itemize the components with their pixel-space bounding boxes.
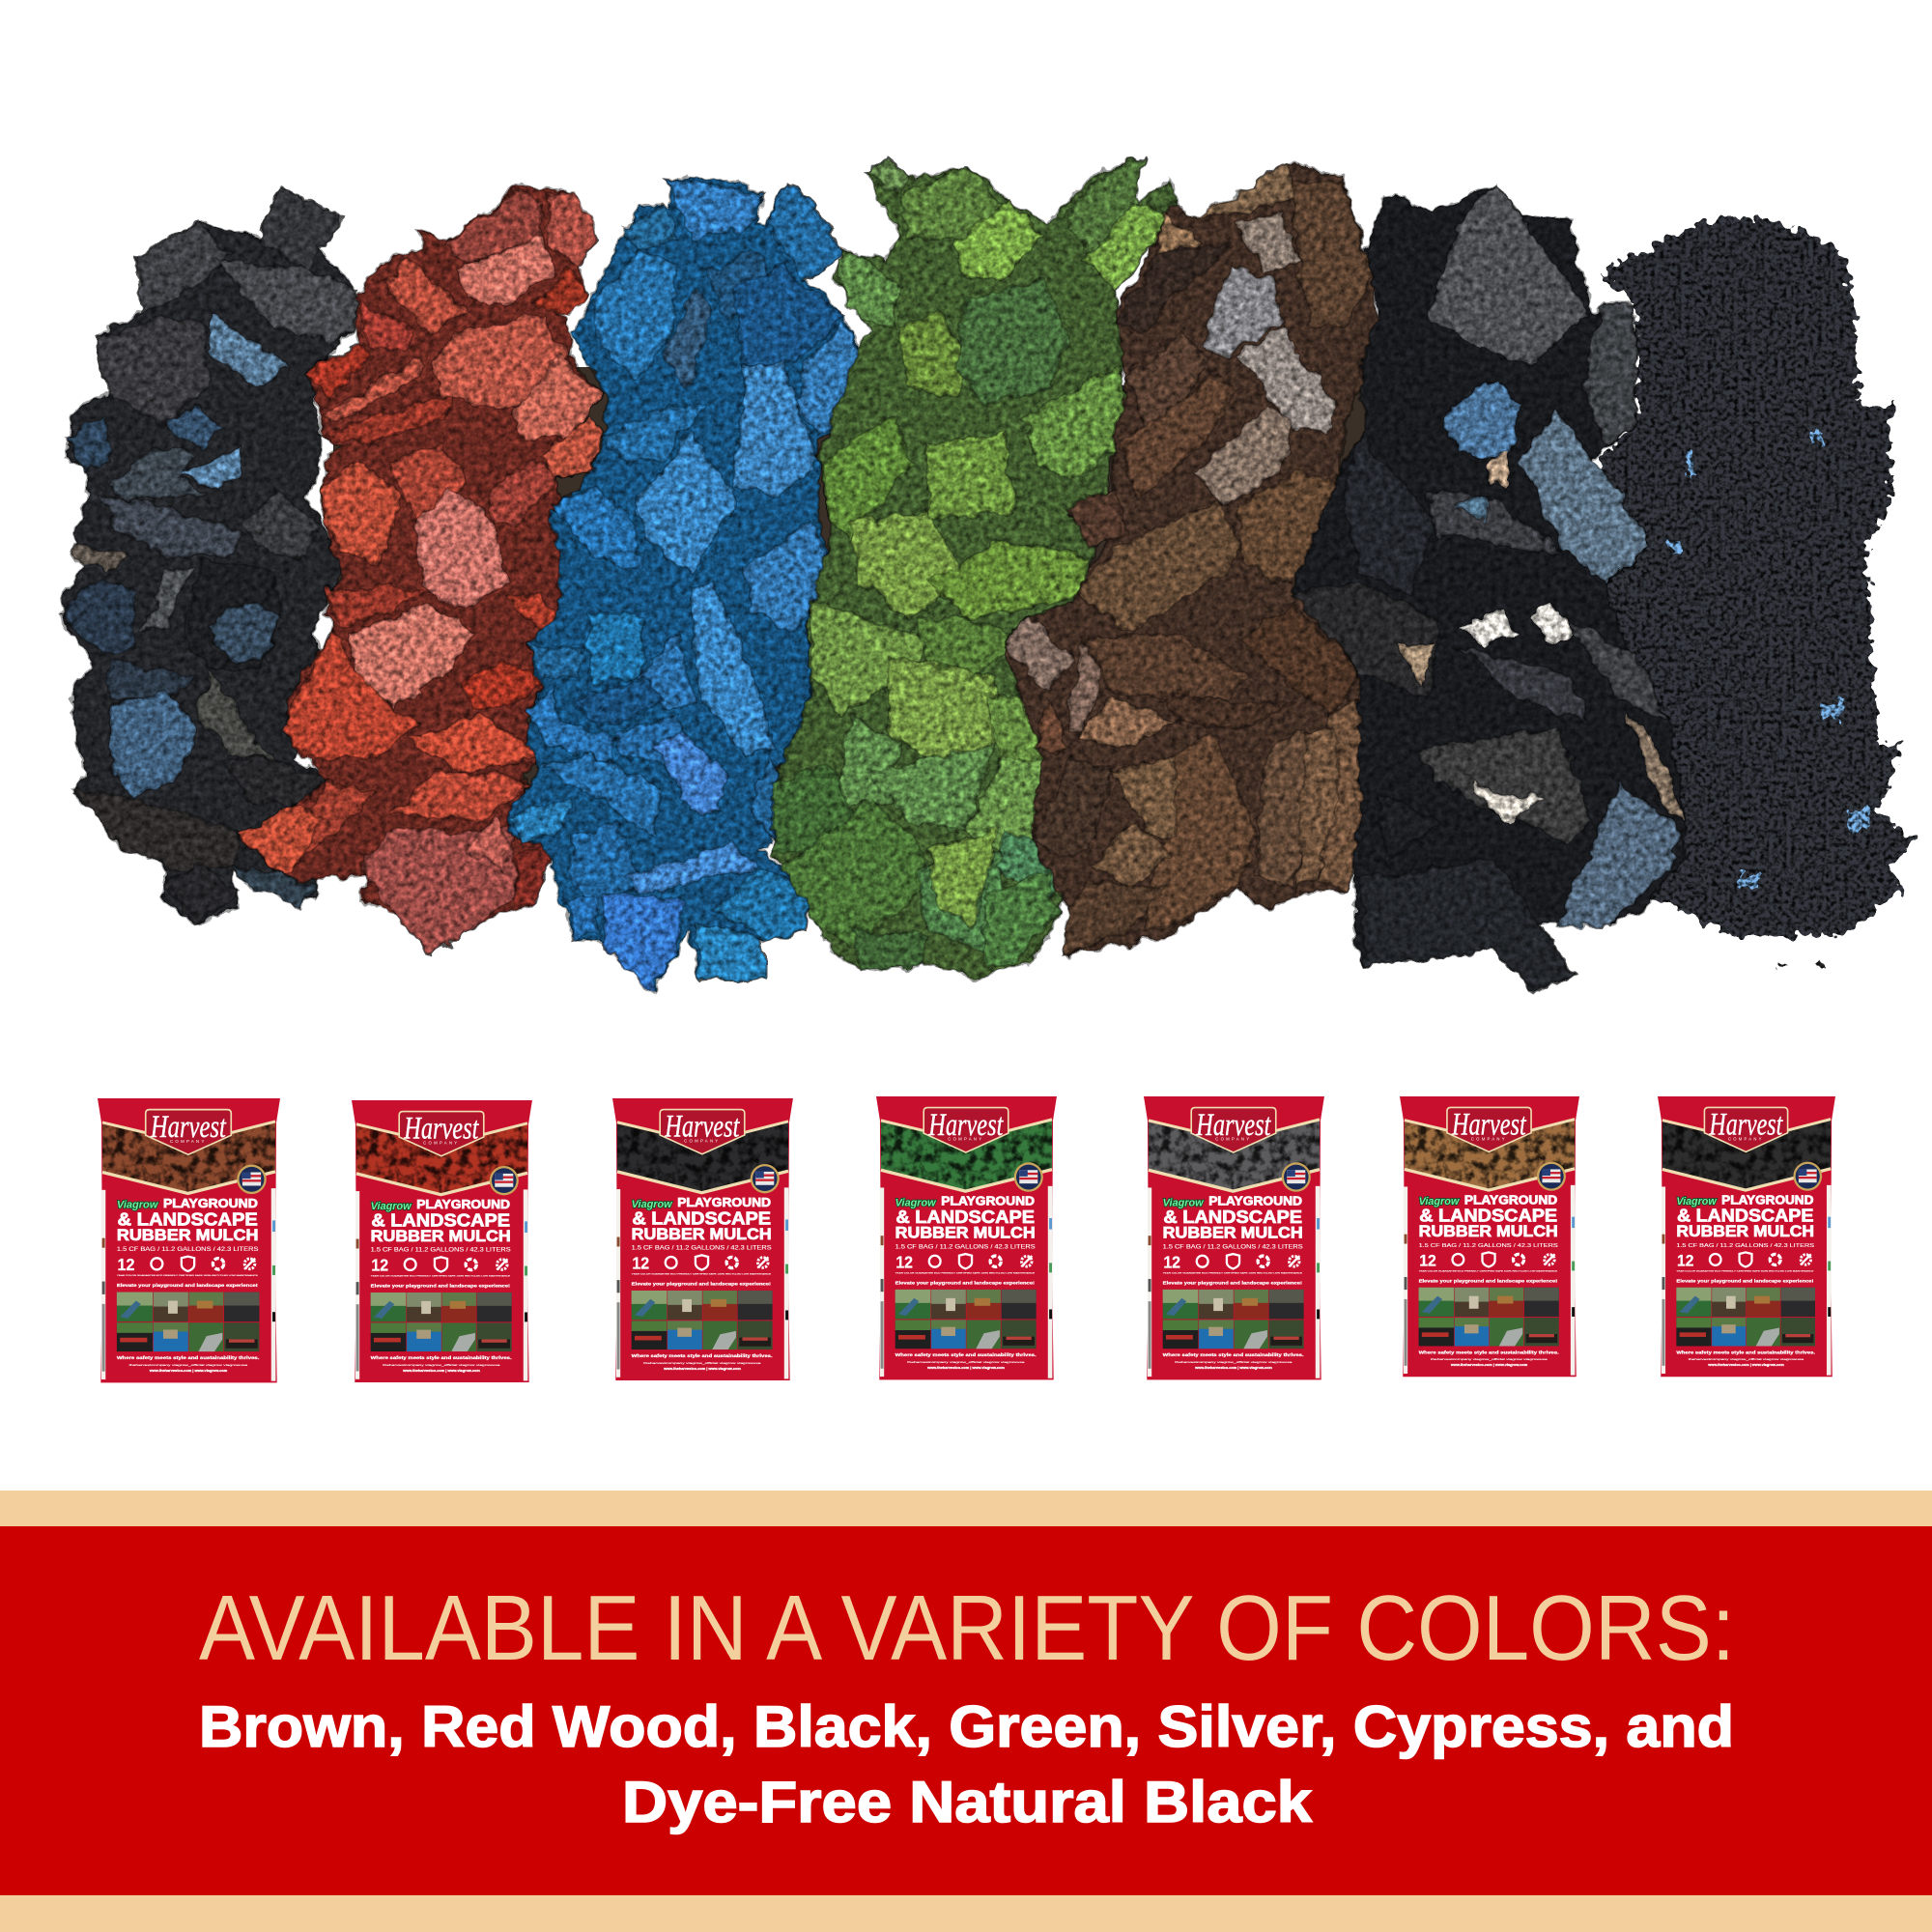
- bag: green: theharvestcompany viagrow_official viagrow viagrowusa: [907, 1360, 1025, 1364]
- product bags row: [98, 1096, 1835, 1382]
- bag: black: & LANDSCAPE: [632, 1208, 771, 1228]
- bag: brown: Harvest: [150, 1109, 226, 1145]
- bag: cypress: RUBBER MULCH: [1419, 1223, 1558, 1240]
- bag: green: Where safety meets style and sustainability thrives.: [895, 1352, 1037, 1358]
- bag: black: RUBBER MULCH: [632, 1226, 772, 1243]
- bag: black: Viagrow: [632, 1199, 673, 1210]
- bag: silver: www.theharvestco.com | www.viagrow.com: [1194, 1366, 1272, 1370]
- bag: brown: PLAYGROUND: [163, 1196, 258, 1210]
- mulch: silver: [59, 186, 356, 924]
- bag: cypress: YEAR COLOR GUARANTEE ECO FRIENDLY CERTIFIED SAFE 100% RECYCLED LOW MAINTENANCE: [1419, 1269, 1558, 1272]
- bag: red wood: theharvestcompany viagrow_official viagrow viagrowusa: [383, 1363, 500, 1367]
- bag: black: www.theharvestco.com | www.viagrow.com: [663, 1367, 741, 1371]
- bag: cypress: theharvestcompany viagrow_official viagrow viagrowusa: [1431, 1357, 1548, 1361]
- bag: black: [612, 1098, 793, 1380]
- bag: brown: theharvestcompany viagrow_official viagrow viagrowusa: [128, 1363, 248, 1367]
- bag: silver: Harvest: [1196, 1108, 1271, 1143]
- color list line 1: Brown, Red Wood, Black, Green, Silver, Cypress, and: [199, 1694, 1734, 1759]
- bag: brown: Elevate your playground and landscape experience!: [117, 1283, 258, 1289]
- bag: black: 1.5 CF BAG / 11.2 GALLONS / 42.3 LITERS: [632, 1246, 772, 1252]
- bag: brown: Where safety meets style and sustainability thrives.: [117, 1355, 260, 1361]
- bag: red wood: COMPANY: [423, 1141, 459, 1146]
- bag: silver: theharvestcompany viagrow_official viagrow viagrowusa: [1175, 1360, 1293, 1364]
- bag: cypress: Where safety meets style and sustainability thrives.: [1419, 1350, 1560, 1355]
- bag: brown: 1.5 CF BAG / 11.2 GALLONS / 42.3 LITERS: [117, 1247, 258, 1253]
- bag: cypress: Harvest: [1451, 1107, 1526, 1142]
- bag: black: Elevate your playground and landscape experience!: [632, 1282, 771, 1288]
- bag: cypress: PLAYGROUND: [1464, 1192, 1557, 1208]
- banner top stripe: [0, 1491, 1932, 1526]
- heading: AVAILABLE IN A VARIETY OF COLORS:: [199, 1577, 1735, 1680]
- banner red panel: [0, 1526, 1932, 1895]
- mulch: red wood: [240, 186, 603, 954]
- bag: red wood: & LANDSCAPE: [371, 1210, 510, 1230]
- bag: green: RUBBER MULCH: [895, 1224, 1036, 1242]
- banner bottom stripe: [0, 1895, 1932, 1932]
- bag: brown: [98, 1098, 280, 1382]
- bag: silver: 12: [1163, 1252, 1180, 1271]
- bag: cypress: www.theharvestco.com | www.viagrow.com: [1450, 1363, 1527, 1367]
- bag: brown: www.theharvestco.com | www.viagrow.com: [149, 1369, 227, 1373]
- mulch: dye-free crumb black: [1595, 217, 1915, 970]
- bag: red wood: Elevate your playground and landscape experience!: [371, 1284, 510, 1290]
- bag: black: PLAYGROUND: [677, 1195, 771, 1209]
- bag: black: Where safety meets style and sustainability thrives.: [632, 1353, 773, 1359]
- bag: silver: COMPANY: [1215, 1137, 1251, 1142]
- banner: [0, 1491, 1932, 1932]
- mulch: green: [773, 158, 1179, 977]
- bag: dye-free natural black: COMPANY: [1728, 1136, 1764, 1141]
- bag: red wood: 12: [371, 1257, 388, 1275]
- bag: cypress: COMPANY: [1471, 1136, 1507, 1141]
- bag: red wood: RUBBER MULCH: [371, 1228, 511, 1245]
- bag: green: www.theharvestco.com | www.viagrow.com: [926, 1366, 1005, 1370]
- bag: dye-free natural black: 1.5 CF BAG / 11.2 GALLONS / 42.3 LITERS: [1676, 1243, 1814, 1249]
- bag: red wood: YEAR COLOR GUARANTEE ECO FRIENDLY CERTIFIED SAFE 100% RECYCLED LOW MAINTENANCE: [371, 1274, 511, 1277]
- bag: green: 12: [895, 1252, 913, 1271]
- bag: black: YEAR COLOR GUARANTEE ECO FRIENDLY CERTIFIED SAFE 100% RECYCLED LOW MAINTENANCE: [632, 1272, 772, 1275]
- bag: cypress: Elevate your playground and landscape experience!: [1419, 1279, 1558, 1285]
- bag: cypress: Viagrow: [1419, 1196, 1460, 1208]
- bag: green: 1.5 CF BAG / 11.2 GALLONS / 42.3 LITERS: [895, 1244, 1036, 1250]
- bag: cypress: 1.5 CF BAG / 11.2 GALLONS / 42.3 LITERS: [1419, 1243, 1558, 1249]
- mulch: blue: [507, 178, 870, 990]
- bag: dye-free natural black: PLAYGROUND: [1721, 1193, 1813, 1208]
- bag: silver: Viagrow: [1163, 1197, 1205, 1208]
- mulch: black: [1293, 184, 1687, 990]
- bag: black: 12: [632, 1255, 649, 1273]
- bag: brown: Viagrow: [117, 1200, 159, 1211]
- bag: red wood: Viagrow: [371, 1201, 412, 1212]
- bag: green: PLAYGROUND: [941, 1194, 1035, 1208]
- bag: brown: RUBBER MULCH: [117, 1226, 258, 1244]
- bag: dye-free natural black: www.theharvestco.com | www.viagrow.com: [1707, 1363, 1784, 1367]
- bag: red wood: Harvest: [404, 1112, 479, 1147]
- bag: green: COMPANY: [948, 1137, 983, 1142]
- bag: brown: 12: [118, 1255, 134, 1274]
- bag: green: YEAR COLOR GUARANTEE ECO FRIENDLY CERTIFIED SAFE 100% RECYCLED LOW MAINTENANCE: [895, 1271, 1036, 1274]
- bag: black: Harvest: [665, 1110, 740, 1145]
- bag: red wood: [352, 1100, 532, 1382]
- bag: dye-free natural black: 12: [1677, 1251, 1693, 1270]
- bag: cypress: [1400, 1096, 1579, 1377]
- bag: dye-free natural black: RUBBER MULCH: [1676, 1223, 1814, 1240]
- bag: dye-free natural black: YEAR COLOR GUARANTEE ECO FRIENDLY CERTIFIED SAFE 100% RECYCLED LOW MAINTENANCE: [1676, 1269, 1814, 1272]
- bag: silver: Elevate your playground and landscape experience!: [1163, 1281, 1302, 1287]
- bag: green: Harvest: [928, 1108, 1004, 1143]
- bag: silver: YEAR COLOR GUARANTEE ECO FRIENDLY CERTIFIED SAFE 100% RECYCLED LOW MAINTENANCE: [1163, 1271, 1303, 1274]
- bag: green: Viagrow: [895, 1197, 937, 1208]
- bag: brown: COMPANY: [170, 1139, 207, 1144]
- bag: silver: & LANDSCAPE: [1163, 1208, 1302, 1227]
- mulch: brown: [1003, 164, 1385, 954]
- bag: cypress: & LANDSCAPE: [1419, 1207, 1557, 1226]
- bag: silver: PLAYGROUND: [1208, 1194, 1302, 1208]
- bag: green: [876, 1096, 1057, 1379]
- bag: dye-free natural black: Elevate your playground and landscape experience!: [1676, 1279, 1814, 1285]
- bag: dye-free natural black: Harvest: [1709, 1107, 1783, 1142]
- bag: silver: 1.5 CF BAG / 11.2 GALLONS / 42.3 LITERS: [1163, 1244, 1303, 1250]
- bag: dye-free natural black: Viagrow: [1676, 1196, 1717, 1208]
- bag: dye-free natural black: [1658, 1096, 1835, 1377]
- bag: green: Elevate your playground and landscape experience!: [895, 1281, 1035, 1287]
- mulch samples row: [59, 158, 1915, 990]
- bag: green: & LANDSCAPE: [895, 1208, 1035, 1227]
- bag: cypress: 12: [1419, 1251, 1436, 1269]
- bag: red wood: PLAYGROUND: [416, 1197, 510, 1211]
- bag: silver: [1144, 1096, 1324, 1379]
- bag: red wood: Where safety meets style and sustainability thrives.: [371, 1355, 512, 1361]
- bag: brown: YEAR COLOR GUARANTEE ECO FRIENDLY CERTIFIED SAFE 100% RECYCLED LOW MAINTENANCE: [117, 1274, 259, 1277]
- bag: brown: & LANDSCAPE: [118, 1208, 258, 1229]
- bag: red wood: 1.5 CF BAG / 11.2 GALLONS / 42.3 LITERS: [371, 1248, 511, 1254]
- bag: black: theharvestcompany viagrow_official viagrow viagrowusa: [643, 1361, 761, 1365]
- bag: silver: Where safety meets style and sustainability thrives.: [1163, 1352, 1304, 1358]
- bag: dye-free natural black: Where safety meets style and sustainability thrives.: [1676, 1350, 1816, 1355]
- bag: silver: RUBBER MULCH: [1163, 1224, 1303, 1242]
- bag: dye-free natural black: theharvestcompany viagrow_official viagrow viagrowusa: [1689, 1357, 1804, 1361]
- bag: black: COMPANY: [684, 1139, 720, 1144]
- bag: red wood: www.theharvestco.com | www.viagrow.com: [402, 1369, 480, 1373]
- bag: dye-free natural black: & LANDSCAPE: [1677, 1206, 1813, 1226]
- color list line 2: Dye-Free Natural Black: [622, 1770, 1313, 1834]
